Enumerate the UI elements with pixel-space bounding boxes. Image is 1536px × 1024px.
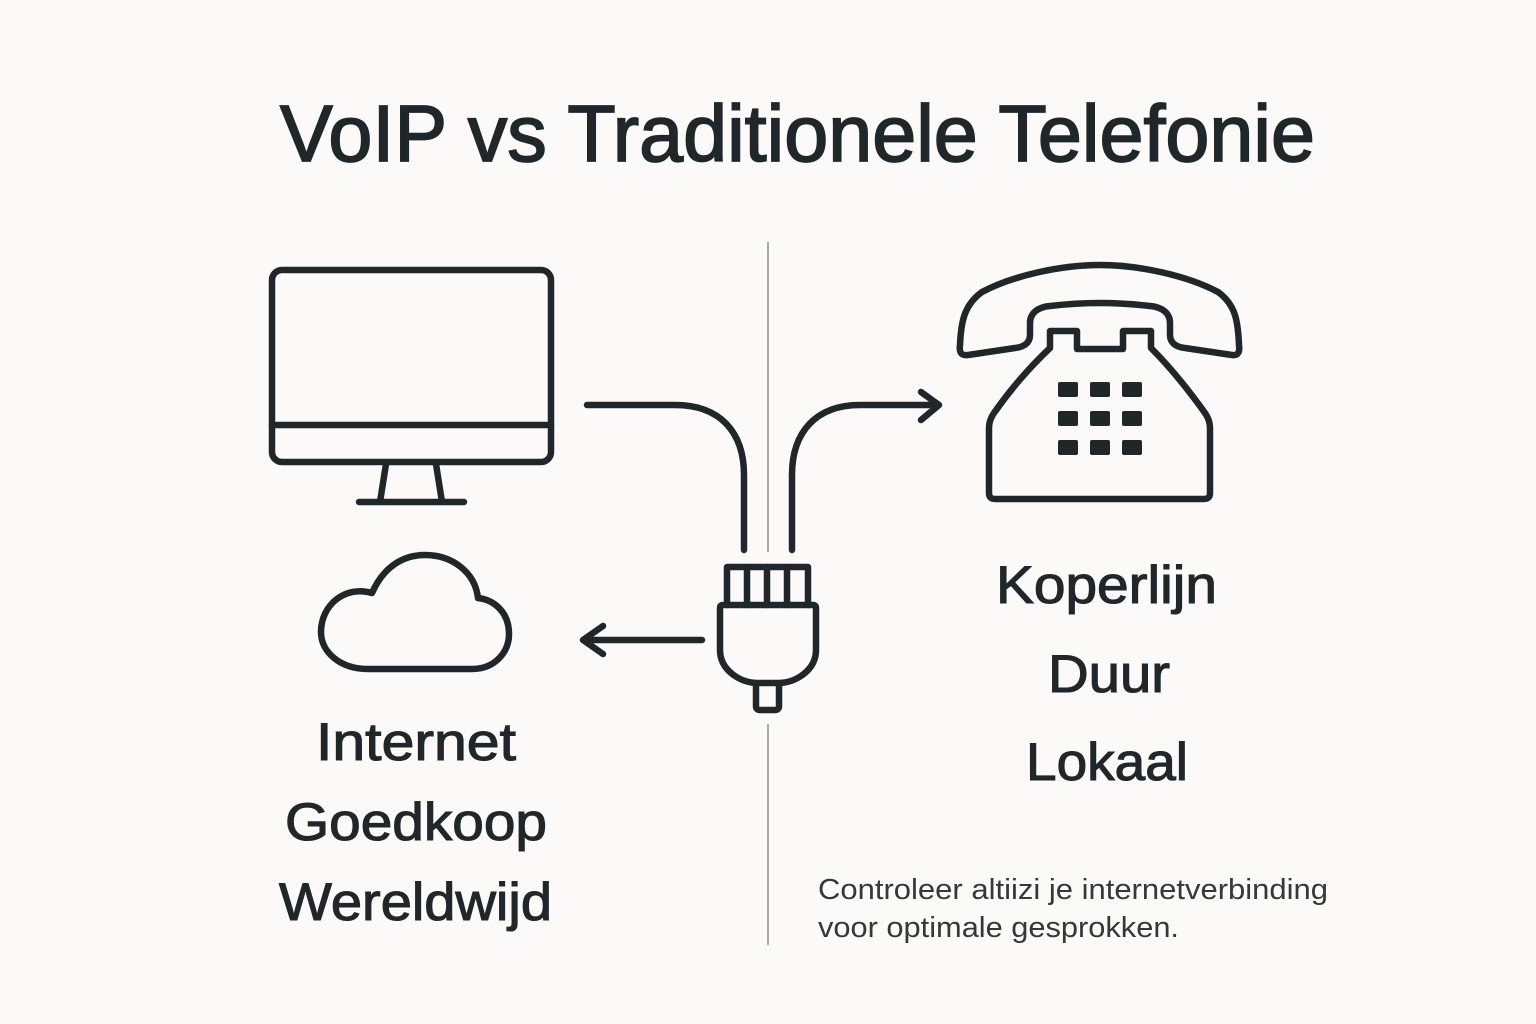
- keypad: [1058, 382, 1142, 455]
- text block: traditional telephony properties: Duur: [1048, 645, 1170, 704]
- text block: traditional telephony properties: Koperlijn: [996, 556, 1217, 615]
- note: voor optimale gesprokken.: [818, 912, 1179, 944]
- handset: [960, 265, 1239, 355]
- arrow: connector to cloud: [583, 626, 702, 654]
- icon: cloud: [321, 555, 509, 669]
- text block: VoIP properties: [279, 713, 552, 932]
- text block: traditional telephony properties: Lokaal: [1026, 733, 1188, 792]
- arrow: monitor to connector: [587, 405, 744, 550]
- text block: VoIP properties: Internet: [316, 713, 516, 772]
- arrow: connector to telephone: [792, 392, 939, 550]
- phone body: [989, 331, 1210, 499]
- icon: computer monitor: [272, 270, 551, 502]
- text block: VoIP properties: Wereldwijd: [279, 873, 552, 932]
- note: Controleer altiizi je internetverbinding: [818, 874, 1328, 906]
- text block: traditional telephony properties: [996, 556, 1217, 792]
- title: VoIP vs Traditionele Telefonie: [280, 89, 1315, 178]
- icon: network connector: [720, 567, 816, 710]
- text block: VoIP properties: Goedkoop: [285, 793, 547, 852]
- note: [818, 874, 1328, 944]
- icon: telephone: [960, 265, 1239, 499]
